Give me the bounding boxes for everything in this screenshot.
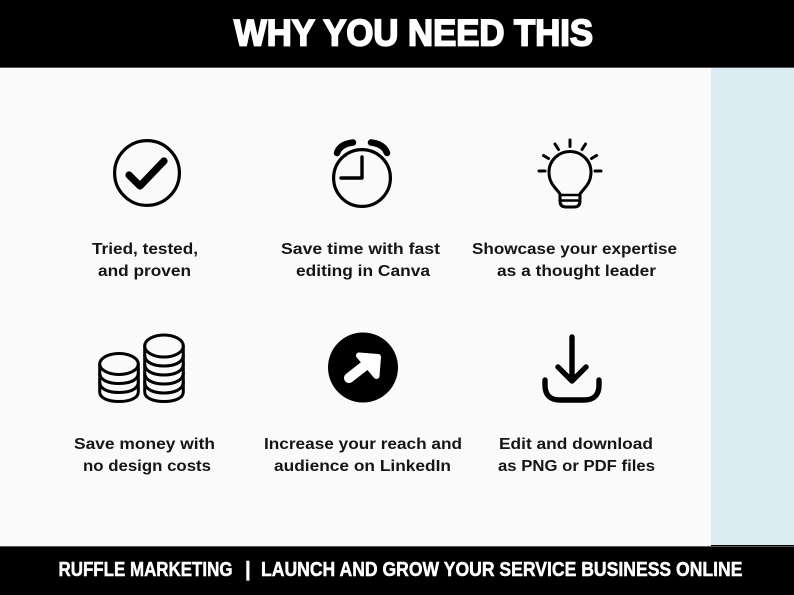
icon: light bulb bbox=[539, 140, 601, 207]
title: WHY YOU NEED THIS bbox=[234, 12, 593, 54]
label: edit and download: Edit and download bbox=[499, 436, 653, 453]
label: tried tested: Tried, tested, bbox=[92, 241, 198, 258]
label: edit and download bbox=[498, 436, 655, 475]
icon: coin stacks bbox=[100, 335, 183, 402]
label: tried tested bbox=[92, 241, 198, 280]
main panel bbox=[0, 68, 711, 546]
label: edit and download: as PNG or PDF files bbox=[498, 458, 655, 475]
icon: check mark bbox=[115, 141, 179, 205]
label: showcase bbox=[472, 241, 677, 280]
icon: arrow in circle bbox=[328, 332, 398, 402]
label: save money: Save money with bbox=[74, 436, 215, 453]
label: increase reach: audience on LinkedIn bbox=[274, 458, 451, 475]
footer text: | bbox=[245, 558, 251, 581]
blue side panel bbox=[711, 68, 794, 545]
icon: alarm clock bbox=[334, 142, 390, 206]
label: save time bbox=[281, 241, 440, 280]
label: tried tested: and proven bbox=[98, 263, 191, 280]
label: showcase: Showcase your expertise bbox=[472, 241, 677, 258]
footer text: RUFFLE MARKETING bbox=[58, 558, 232, 581]
footer text bbox=[58, 558, 742, 581]
label: showcase: as a thought leader bbox=[497, 263, 656, 280]
label: save money bbox=[74, 436, 215, 475]
label: save time: Save time with fast bbox=[281, 241, 440, 258]
icon: download bbox=[545, 337, 599, 400]
label: save time: editing in Canva bbox=[296, 263, 430, 280]
label: increase reach: Increase your reach and bbox=[264, 436, 462, 453]
label: increase reach bbox=[264, 436, 462, 475]
label: save money: no design costs bbox=[83, 458, 211, 475]
